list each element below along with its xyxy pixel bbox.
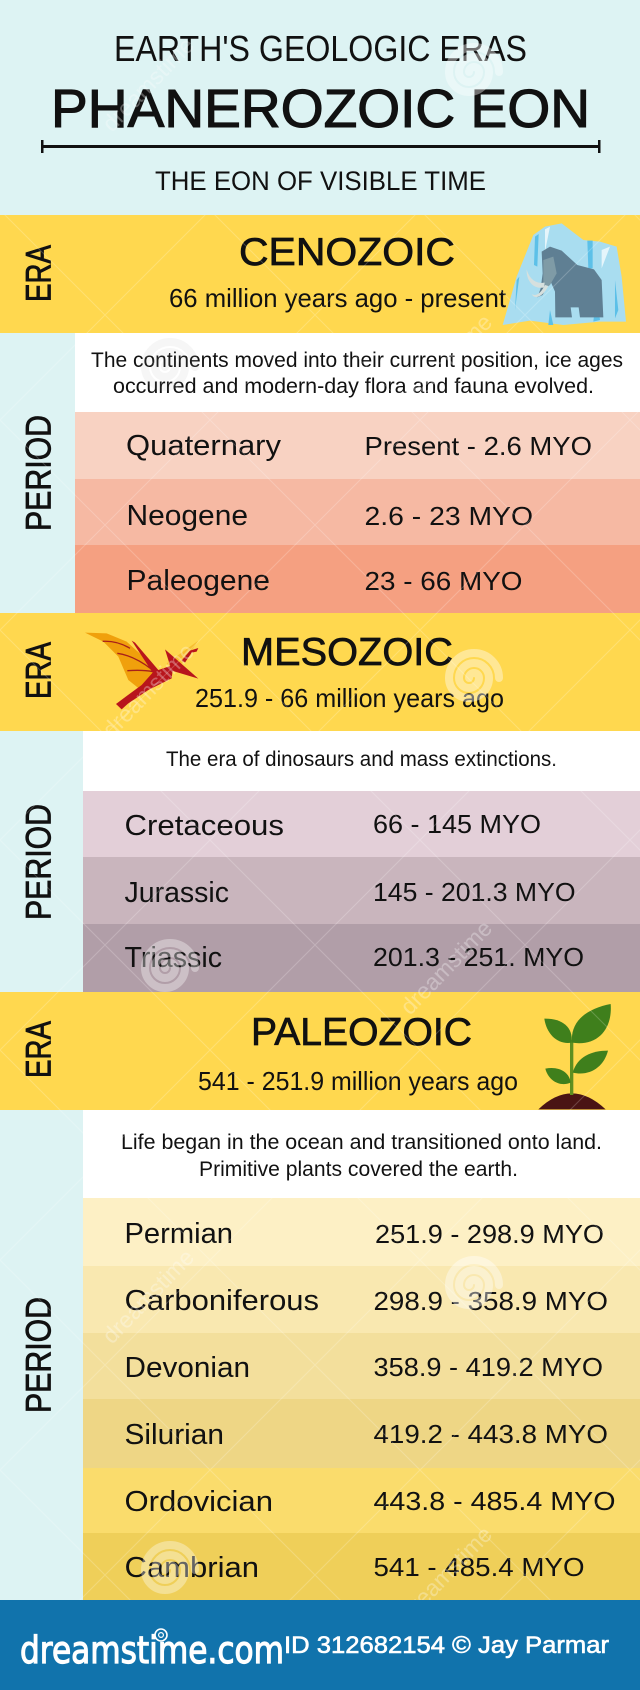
header [41,28,600,196]
subtitle: THE EON OF VISIBLE TIME [155,166,486,196]
row: Silurian: 419.2 - 443.8 MYO [374,1419,608,1449]
era label: ERA [20,641,58,699]
row: Silurian [83,1399,640,1468]
watermark overlay: dreamstime [395,915,497,1019]
watermark overlay: dreamstime [395,309,497,413]
row: Quaternary: Present - 2.6 MYO [364,431,592,461]
row: Ordovician: Ordovician [124,1486,273,1518]
description: occurred and modern-day flora and fauna evolved. [113,375,594,398]
row: Permian: 251.9 - 298.9 MYO [375,1219,604,1249]
title rule with end ticks [41,140,600,153]
row: Triassic [83,924,640,992]
row: Paleogene [75,545,640,613]
row: Permian [83,1198,640,1266]
row: Ordovician [83,1468,640,1533]
watermark overlay: dreamstime [97,638,199,742]
era name: MESOZOIC [241,631,453,674]
row: Jurassic: Jurassic [124,877,229,909]
era date range: 541 - 251.9 million years ago [198,1066,518,1096]
row: Neogene: 2.6 - 23 MYO [364,501,533,531]
row: Cretaceous: 66 - 145 MYO [373,809,541,839]
era date range: 66 million years ago - present [169,283,507,313]
row: Jurassic: 145 - 201.3 MYO [373,877,576,907]
row: Quaternary: Quaternary [126,430,282,462]
watermark overlay: dreamstime [97,32,199,136]
panel: Mesozoic periods [20,731,640,992]
description: Primitive plants covered the earth. [199,1158,518,1181]
row: Ordovician: 443.8 - 485.4 MYO [374,1486,616,1516]
row: Triassic: 201.3 - 251. MYO [373,942,584,972]
panel: Cenozoic periods [20,333,640,613]
era date range: 251.9 - 66 million years ago [195,683,504,713]
watermark overlay: dreamstime [97,1244,199,1348]
row: Neogene [75,479,640,545]
era label: ERA [20,1020,58,1078]
description: The era of dinosaurs and mass extinctions. [166,748,557,771]
era name: PALEOZOIC [251,1011,472,1054]
row: Carboniferous: 298.9 - 358.9 MYO [374,1286,608,1316]
era name: CENOZOIC [239,231,455,274]
icon: seedling [538,1004,611,1109]
row: Silurian: Silurian [124,1419,224,1451]
row: Cambrian: 541 - 485.4 MYO [374,1552,584,1582]
title: Earth's Geologic Eras: EARTH'S GEOLOGIC ERAS [114,28,527,69]
watermark overlay: dreamstime [395,1521,497,1625]
row: Permian: Permian [124,1218,233,1250]
description: The continents moved into their current position, ice ages [91,349,623,372]
row: Devonian: Devonian [124,1352,250,1384]
row: Cambrian: Cambrian [124,1552,259,1584]
row: Devonian [83,1333,640,1399]
row: Triassic: Triassic [124,942,222,974]
row: Neogene: Neogene [126,500,248,532]
icon: mammoth in ice [503,223,626,325]
row: Jurassic [83,857,640,924]
row: Paleogene: 23 - 66 MYO [364,566,522,596]
description [83,731,640,791]
footer logo: dreamstime: dreamstime.com [20,1629,284,1672]
row: Cretaceous [83,791,640,857]
row: Carboniferous: Carboniferous [124,1285,319,1317]
icon: pterosaur [85,633,198,709]
period column: PERIOD [20,804,58,920]
row: Paleogene: Paleogene [126,565,270,597]
row: Cambrian [83,1533,640,1600]
description [83,1110,640,1198]
row: Cretaceous: Cretaceous [124,810,284,842]
era label: ERA [20,244,58,302]
row: Quaternary [75,412,640,479]
era band: Mesozoic [0,613,640,731]
row: Carboniferous [83,1266,640,1333]
description [75,333,640,412]
era band: Cenozoic [0,215,640,333]
panel: Paleozoic periods [20,1110,640,1600]
description: Life began in the ocean and transitioned onto land. [121,1131,602,1154]
footer credit: ID 312682154 © Jay Parmar [284,1632,609,1659]
period column: PERIOD [20,1297,58,1413]
heading: Phanerozoic Eon: PHANEROZOIC EON [51,79,590,139]
period column: PERIOD [20,415,58,531]
footer bar [0,1600,640,1690]
row: Devonian: 358.9 - 419.2 MYO [374,1352,603,1382]
era band: Paleozoic [0,992,640,1110]
